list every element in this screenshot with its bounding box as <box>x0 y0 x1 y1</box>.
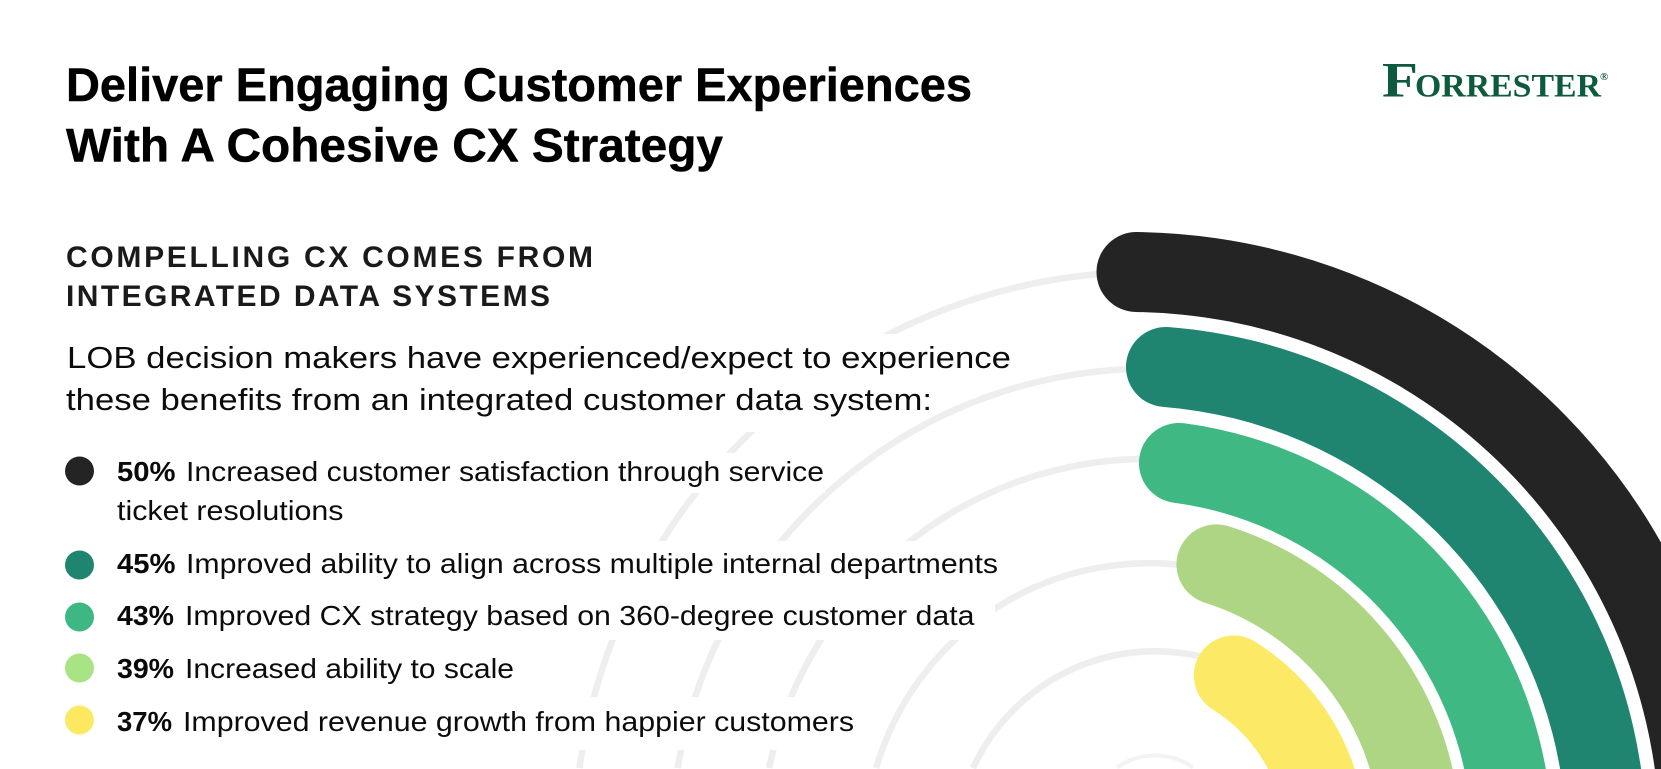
title <box>66 59 972 172</box>
logo: Forrester: ORRESTER <box>1415 68 1602 104</box>
subheading: COMPELLING CX COMES FROM <box>66 241 593 274</box>
item: 39% <box>65 653 514 684</box>
intro paragraph: these benefits from an integrated customer data system: <box>66 382 932 417</box>
item: 50%: Increased customer satisfaction through service <box>186 456 824 487</box>
item: 45%: 45% <box>117 548 176 579</box>
logo: Forrester: F <box>1382 52 1418 108</box>
legend list <box>65 456 998 737</box>
item: 43%: Improved CX strategy based on 360-degree customer data <box>185 600 975 631</box>
item: 50%: ticket resolutions <box>117 495 344 526</box>
item: 50% <box>65 456 824 526</box>
arc: 50% <box>1096 232 1661 769</box>
text background masks <box>0 334 995 750</box>
subheading <box>66 241 593 313</box>
title: Deliver Engaging Customer Experiences <box>66 59 972 112</box>
item: 43%: 43% <box>117 600 174 631</box>
radial bar chart <box>1096 232 1661 769</box>
intro paragraph: LOB decision makers have experienced/expect to experience <box>67 340 1011 375</box>
item: 37%: Improved revenue growth from happier customers <box>183 706 854 737</box>
logo: Forrester: ® <box>1600 71 1608 83</box>
item: 39%: 39% <box>117 653 174 684</box>
arc: 45% <box>1126 327 1641 769</box>
arc: 39% <box>1176 524 1453 769</box>
arc: 43% <box>1139 423 1546 769</box>
arc: 37% <box>1194 635 1355 769</box>
title: With A Cohesive CX Strategy <box>66 120 724 172</box>
item: 50%: 50% <box>117 456 176 487</box>
logo: Forrester <box>1382 52 1608 108</box>
item: 37%: 37% <box>117 706 172 737</box>
subheading: INTEGRATED DATA SYSTEMS <box>66 280 550 313</box>
item: 39%: Increased ability to scale <box>185 653 514 684</box>
background rings <box>580 272 1233 768</box>
item: 45%: Improved ability to align across multiple internal departments <box>186 548 998 579</box>
intro paragraph <box>66 340 1011 417</box>
